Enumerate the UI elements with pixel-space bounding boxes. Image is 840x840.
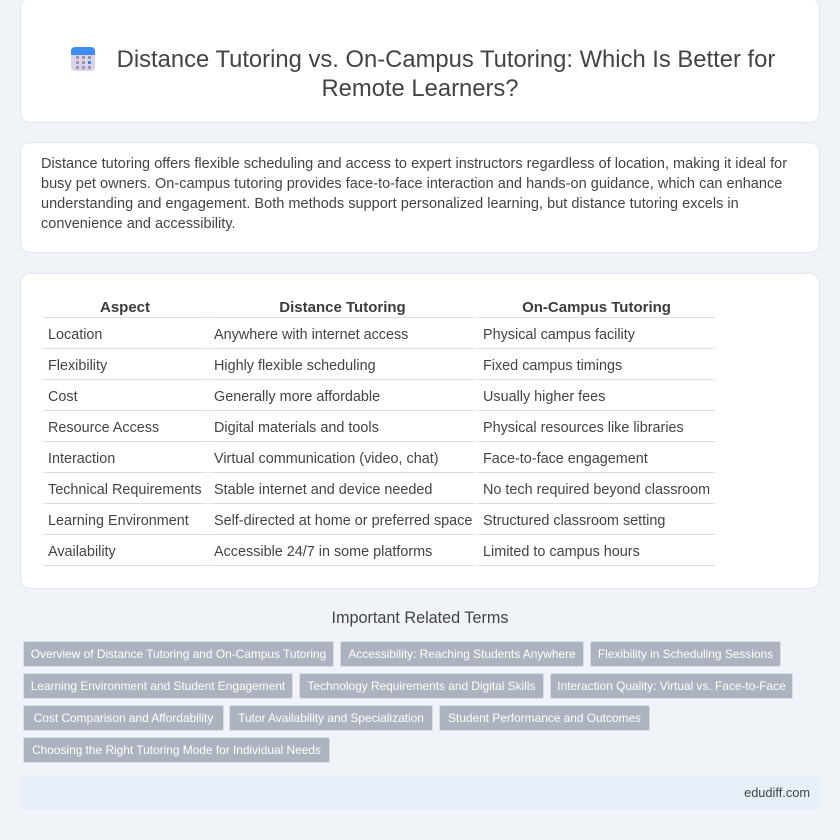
comparison table: Face-to-face engagement [483, 451, 648, 467]
comparison table: Structured classroom setting [483, 513, 665, 529]
related term tags: Flexibility in Scheduling Sessions [598, 647, 773, 661]
title: Distance Tutoring vs. On-Campus Tutoring: Which Is Better for [117, 46, 775, 73]
comparison table card [20, 273, 820, 589]
comparison table: Anywhere with internet access [214, 327, 408, 343]
comparison table: Physical resources like libraries [483, 420, 684, 436]
related term tags: Overview of Distance Tutoring and On-Campus Tutoring [31, 647, 326, 661]
comparison table: Fixed campus timings [483, 358, 622, 374]
comparison table: Cost [48, 389, 78, 405]
comparison table: Generally more affordable [214, 389, 380, 405]
intro paragraph: busy pet owners. On-campus tutoring provides face-to-face interaction and hands-on guidance, which can enhance [41, 176, 782, 192]
comparison table: Stable internet and device needed [214, 482, 432, 498]
intro paragraph [41, 156, 787, 232]
related term tags: Technology Requirements and Digital Skills [307, 679, 536, 693]
comparison table: Interaction [48, 451, 115, 467]
comparison table: Accessible 24/7 in some platforms [214, 544, 432, 560]
related term tags: Learning Environment and Student Engagement [31, 679, 285, 693]
icon: calendar [71, 47, 95, 71]
comparison table: Aspect [100, 299, 150, 316]
comparison table: Distance Tutoring [279, 299, 406, 316]
intro paragraph: convenience and accessibility. [41, 216, 236, 232]
comparison table: Learning Environment [48, 513, 189, 529]
comparison table: Flexibility [48, 358, 107, 374]
related term tags: Student Performance and Outcomes [448, 711, 641, 725]
footer site name: edudiff.com [744, 785, 810, 800]
intro paragraph: Distance tutoring offers flexible scheduling and access to expert instructors regardless of location, making it ideal for [41, 156, 787, 172]
header card [20, 0, 820, 123]
comparison table: Usually higher fees [483, 389, 605, 405]
title [117, 46, 775, 102]
intro paragraph: understanding and engagement. Both methods support personalized learning, but distance tutoring excels in [41, 196, 739, 212]
comparison table: Virtual communication (video, chat) [214, 451, 438, 467]
comparison table: No tech required beyond classroom [483, 482, 710, 498]
comparison table: On-Campus Tutoring [522, 299, 671, 316]
related terms heading: Important Related Terms [332, 609, 508, 627]
comparison table: Highly flexible scheduling [214, 358, 376, 374]
related term tags: Accessibility: Reaching Students Anywhere [348, 647, 576, 661]
comparison table: Availability [48, 544, 116, 560]
comparison table: Digital materials and tools [214, 420, 379, 436]
comparison table: Physical campus facility [483, 327, 635, 343]
related term tags: Choosing the Right Tutoring Mode for Individual Needs [32, 743, 321, 757]
related term tags: Interaction Quality: Virtual vs. Face-to-Face [557, 679, 786, 693]
comparison table: Resource Access [48, 420, 159, 436]
comparison table: Location [48, 327, 102, 343]
comparison table: Self-directed at home or preferred space [214, 513, 472, 529]
footer [20, 776, 820, 810]
title: Remote Learners? [321, 75, 519, 102]
related term tags: Cost Comparison and Affordability [34, 711, 213, 725]
related term tags: Tutor Availability and Specialization [238, 711, 424, 725]
comparison table: Technical Requirements [48, 482, 202, 498]
comparison table: Limited to campus hours [483, 544, 640, 560]
intro text card [20, 142, 820, 253]
